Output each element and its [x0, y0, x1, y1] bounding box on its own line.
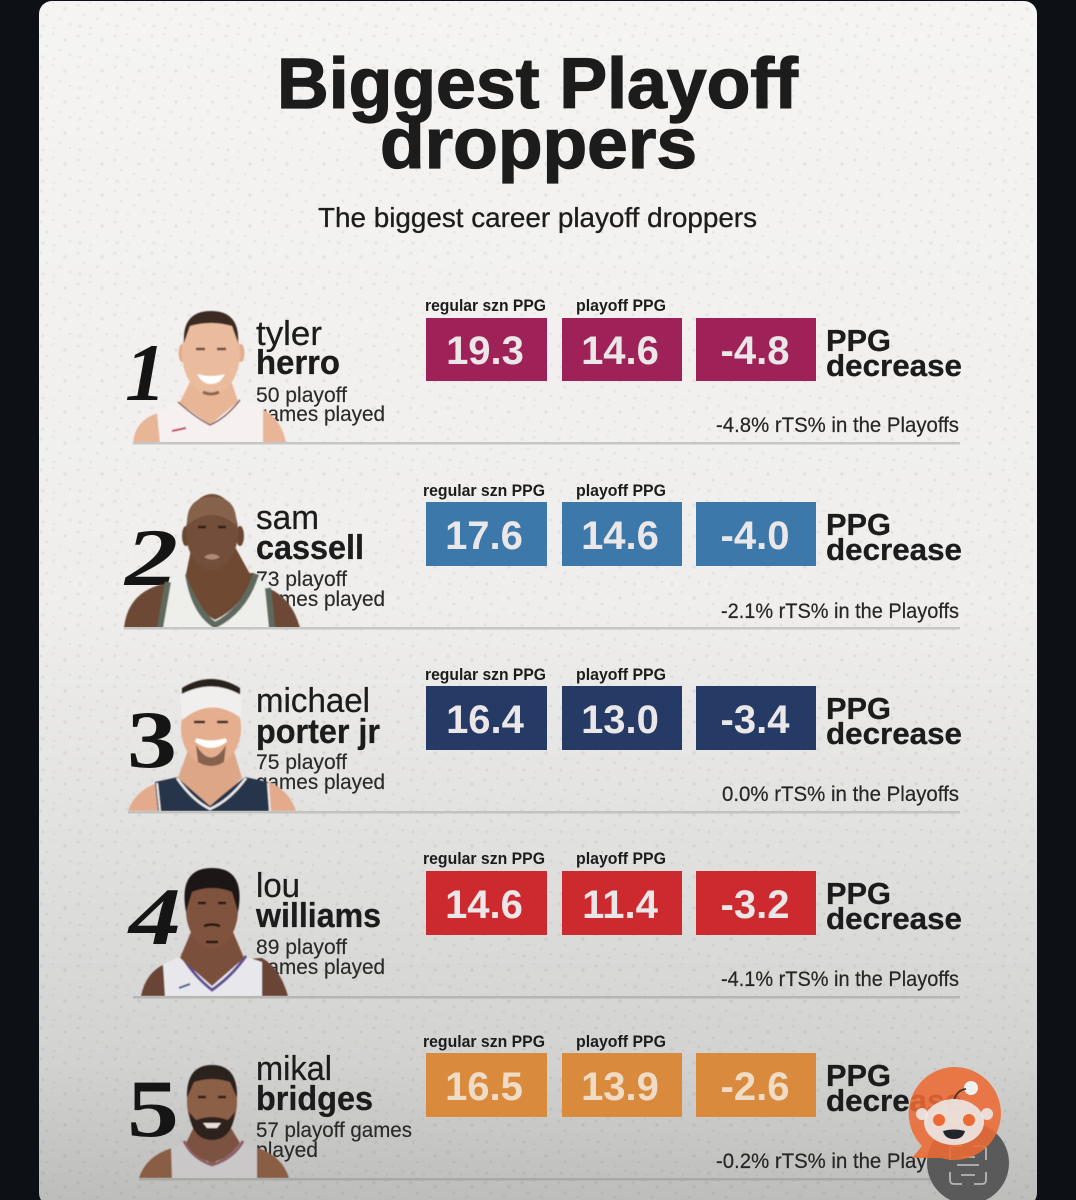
rTS note: 0.0% rTS% in the Playoffs	[722, 783, 959, 806]
rTS note: -4.8% rTS% in the Playoffs	[716, 414, 959, 437]
player name: michael	[256, 682, 370, 720]
games played	[256, 1119, 412, 1162]
stat box regular: 16.5	[445, 1065, 523, 1109]
player name	[256, 1050, 373, 1118]
stat box regular: 19.3	[446, 329, 524, 373]
rank 4: 4	[126, 871, 181, 962]
PPG decrease label	[826, 876, 962, 936]
stat box decrease	[696, 1053, 816, 1117]
PPG decrease label	[826, 323, 962, 383]
player name: tyler	[256, 315, 322, 353]
PPG decrease label: PPG	[826, 1058, 891, 1093]
rank 1: 1	[125, 327, 166, 418]
PPG decrease label: PPG	[826, 507, 891, 542]
panel: row 5 mikal bridges	[127, 1032, 962, 1180]
divider	[133, 996, 960, 998]
stat box playoff: 14.6	[581, 514, 659, 558]
games played: 50 playoff	[256, 384, 347, 407]
panel: row 1 tyler herro	[125, 296, 962, 444]
stat box regular	[426, 502, 547, 566]
stat box decrease: -3.4	[721, 698, 790, 742]
player portrait	[128, 679, 296, 811]
playoff label: playoff PPG	[576, 849, 666, 868]
player name: lou	[256, 867, 300, 905]
stat box regular	[426, 1053, 547, 1117]
stat box playoff: 13.9	[581, 1065, 659, 1109]
playoff label: playoff PPG	[576, 1032, 666, 1051]
title: droppers	[380, 105, 697, 184]
stat box playoff: 14.6	[581, 329, 659, 373]
icon: scan button	[927, 1122, 1009, 1200]
title	[277, 45, 798, 184]
games played	[256, 384, 385, 426]
divider	[139, 1178, 959, 1180]
games played: 57 playoff games	[256, 1119, 412, 1142]
stat box playoff	[562, 318, 682, 381]
games played	[256, 936, 385, 979]
games played: 89 playoff	[256, 936, 347, 959]
player portrait	[141, 868, 288, 996]
player name	[256, 682, 380, 751]
player portrait	[139, 1065, 289, 1178]
PPG decrease label: PPG	[826, 876, 891, 911]
player name: porter jr	[256, 713, 380, 751]
PPG decrease label	[826, 1058, 962, 1118]
games played: 75 playoff	[256, 751, 347, 774]
player name: herro	[256, 344, 340, 382]
stat box decrease: -4.0	[721, 514, 789, 558]
playoff label: playoff PPG	[576, 481, 666, 500]
regular season label: regular szn PPG	[425, 665, 546, 684]
stat box regular	[426, 318, 547, 381]
stat box playoff: 13.0	[581, 698, 659, 742]
PPG decrease label: decrease	[826, 716, 962, 751]
player name: bridges	[256, 1080, 373, 1118]
stat box decrease	[696, 871, 816, 935]
games played	[256, 568, 385, 611]
stat box decrease: -2.6	[721, 1065, 789, 1109]
PPG decrease label: decrease	[826, 901, 962, 936]
games played: games played	[256, 588, 385, 611]
games played: games played	[256, 403, 385, 426]
panel: row 3 michael porter jr	[127, 665, 962, 814]
stat box decrease: -4.8	[721, 329, 789, 373]
rTS note: -2.1% rTS% in the Playoffs	[721, 600, 959, 623]
games played: games played	[256, 771, 385, 794]
games played: games played	[256, 956, 385, 979]
panel: row 4 lou williams	[126, 849, 962, 998]
player name: mikal	[256, 1050, 332, 1088]
regular season label: regular szn PPG	[423, 1032, 545, 1051]
PPG decrease label	[826, 691, 962, 751]
stat box decrease: -3.2	[721, 883, 789, 927]
PPG decrease label: decrease	[826, 532, 962, 567]
PPG decrease label: PPG	[826, 691, 891, 726]
divider	[124, 627, 960, 630]
stat box regular	[426, 686, 547, 750]
panel: row 2 sam cassell	[124, 481, 962, 630]
stat box playoff	[562, 502, 682, 566]
games played: played	[256, 1139, 318, 1162]
PPG decrease label	[826, 507, 962, 567]
title: Biggest Playoff	[277, 45, 798, 124]
stat box decrease	[696, 686, 816, 750]
rank 2: 2	[124, 512, 178, 603]
subtitle: The biggest career playoff droppers	[318, 202, 757, 233]
playoff label: playoff PPG	[576, 665, 666, 684]
divider	[133, 442, 960, 444]
player name	[256, 499, 364, 567]
regular season label: regular szn PPG	[423, 849, 545, 868]
playoff label: playoff PPG	[576, 296, 666, 315]
stat box regular: 16.4	[446, 698, 525, 742]
player name: cassell	[256, 529, 364, 567]
player portrait	[133, 311, 286, 443]
divider	[128, 811, 960, 814]
games played	[256, 751, 385, 794]
regular season label: regular szn PPG	[425, 296, 546, 315]
stat box decrease	[696, 502, 816, 566]
rank 3: 3	[127, 694, 177, 785]
PPG decrease label: decrease	[826, 348, 962, 383]
rTS note: -0.2% rTS% in the Playoffs	[716, 1150, 959, 1173]
icon: reddit logo	[909, 1067, 1001, 1160]
rTS note: -4.1% rTS% in the Playoffs	[721, 968, 959, 991]
player name	[255, 867, 381, 935]
games played: 73 playoff	[256, 568, 347, 591]
stat box playoff	[562, 1053, 682, 1117]
stat box regular: 14.6	[445, 883, 523, 927]
player portrait	[124, 494, 300, 628]
player name	[256, 315, 340, 382]
stat box playoff	[562, 871, 682, 935]
stat box regular	[426, 871, 547, 935]
player name: williams	[255, 897, 381, 935]
stat box regular: 17.6	[445, 514, 523, 558]
player name: sam	[256, 499, 319, 537]
regular season label: regular szn PPG	[423, 481, 545, 500]
stat box playoff	[562, 686, 682, 750]
rank 5: 5	[127, 1063, 179, 1154]
PPG decrease label: decrease	[826, 1083, 962, 1118]
stat box decrease	[696, 318, 816, 381]
PPG decrease label: PPG	[826, 323, 891, 358]
stat box playoff: 11.4	[582, 883, 659, 927]
